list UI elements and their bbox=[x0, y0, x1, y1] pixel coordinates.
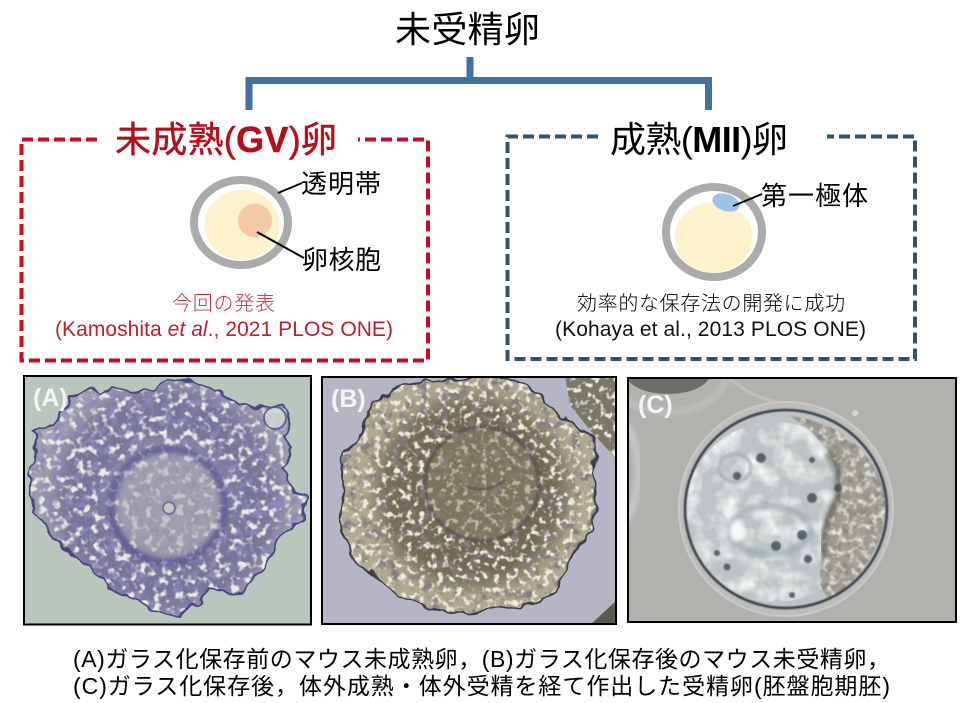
photo B: vitrified oocyte bbox=[321, 376, 617, 625]
red dashed frame bbox=[22, 140, 428, 360]
panel: mature MII oocyte bbox=[508, 119, 915, 359]
diagram: GV oocyte bbox=[194, 180, 304, 265]
blue dashed frame bbox=[508, 136, 915, 359]
heading: mature MII oocyte: 成熟(MII)卵 bbox=[610, 119, 788, 160]
citation: Kohaya: (Kohaya et al., 2013 PLOS ONE) bbox=[555, 318, 866, 341]
caption line 2: (C)ガラス化保存後，体外成熟・体外受精を経て作出した受精卵(胚盤胞期胚) bbox=[73, 673, 890, 699]
label: first polar body: 第一極体 bbox=[761, 181, 868, 211]
note: efficient preservation: 効率的な保存法の開発に成功 bbox=[577, 292, 845, 315]
caption line 1: (A)ガラス化保存前のマウス未成熟卵，(B)ガラス化保存後のマウス未受精卵， bbox=[73, 646, 890, 672]
photo A: immature oocyte bbox=[23, 375, 312, 625]
label C: (C) bbox=[638, 391, 673, 419]
tree connector bbox=[249, 57, 708, 110]
diagram: MII oocyte bbox=[666, 187, 762, 277]
citation: Kamoshita: (Kamoshita et al., 2021 PLOS ONE) bbox=[55, 318, 393, 341]
note: this presentation: 今回の発表 bbox=[172, 292, 275, 315]
label A: (A) bbox=[33, 384, 68, 412]
label: germinal vesicle: 卵核胞 bbox=[302, 245, 381, 275]
panel: immature GV oocyte bbox=[22, 119, 428, 360]
caption bbox=[73, 646, 890, 699]
label B: (B) bbox=[331, 385, 366, 413]
photo C: blastocyst bbox=[627, 377, 957, 623]
heading: immature GV oocyte: 未成熟(GV)卵 bbox=[115, 119, 337, 160]
label: zona pellucida: 透明帯 bbox=[301, 169, 381, 199]
title: 未受精卵 bbox=[395, 9, 540, 50]
